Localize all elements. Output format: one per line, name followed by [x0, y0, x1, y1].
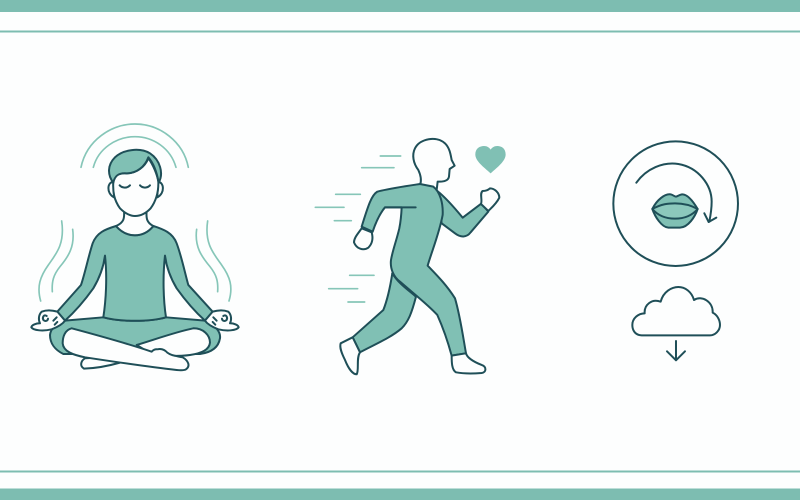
- lips: [652, 194, 698, 228]
- fist left: [354, 228, 372, 249]
- front foot: [452, 353, 485, 373]
- left leg and foot: [63, 328, 188, 370]
- hip line: [392, 273, 416, 297]
- bottom rule: [0, 470, 800, 472]
- torso and front leg: [362, 184, 466, 356]
- ears: [108, 182, 114, 197]
- calm waves right: [196, 221, 231, 301]
- face: [113, 158, 158, 216]
- down arrow: [667, 341, 685, 360]
- halo arcs: [81, 124, 188, 167]
- rear foot: [340, 337, 360, 374]
- rear arm: [437, 191, 488, 236]
- torso and arms: [57, 226, 213, 321]
- bottom band: [0, 488, 800, 500]
- motion lines upper: [315, 156, 401, 221]
- calm waves left: [39, 221, 73, 301]
- legs base: [50, 317, 220, 354]
- head and neck: [413, 139, 455, 190]
- top band: [0, 0, 800, 12]
- rear foot: [81, 357, 120, 369]
- top rule: [0, 30, 800, 32]
- rear leg: [353, 273, 416, 352]
- arm inner line: [385, 204, 416, 210]
- circular arrow: [636, 164, 716, 222]
- neck: [116, 210, 153, 235]
- right thigh: [137, 328, 210, 356]
- motion lines lower: [329, 275, 374, 302]
- heart: [475, 146, 506, 173]
- right hand: [205, 310, 239, 330]
- icon: mouth breathing circle: [613, 141, 738, 360]
- icon: running person: [315, 139, 506, 374]
- outer circle: [613, 141, 738, 266]
- closed eyes: [120, 185, 150, 188]
- hair: [109, 150, 161, 183]
- icon: meditating person: [31, 124, 239, 370]
- fist right: [481, 188, 499, 211]
- left hand: [31, 310, 65, 330]
- icon: cloud: [632, 287, 720, 335]
